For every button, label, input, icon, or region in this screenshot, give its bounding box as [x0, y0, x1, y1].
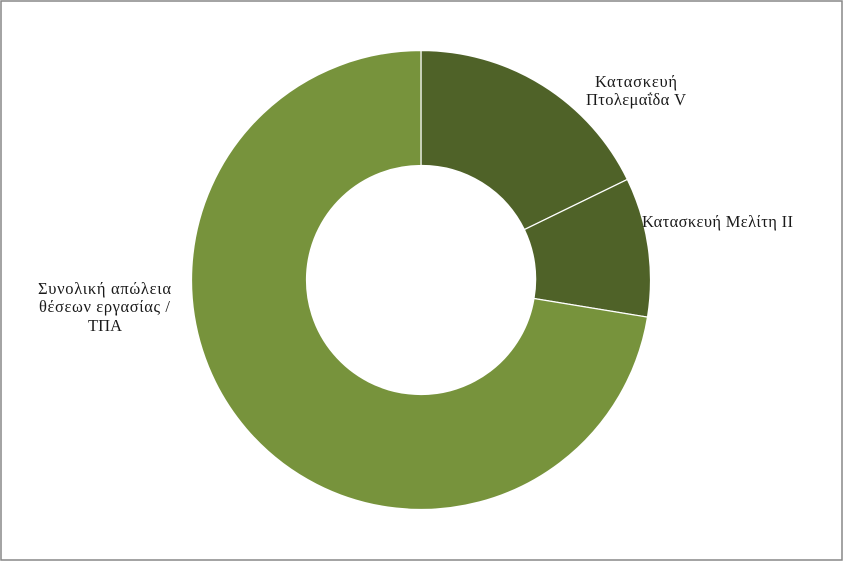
label: Κατασκευή Πτολεμαΐδα V: Κατασκευή	[595, 72, 677, 91]
label: Συνολική απώλεια θέσεων εργασίας / ΤΠΑ: ΤΠΑ	[88, 316, 122, 335]
label: Κατασκευή Πτολεμαΐδα V	[586, 72, 686, 109]
donut chart	[192, 50, 651, 510]
segment: Κατασκευή Πτολεμαΐδα V	[421, 50, 627, 230]
label: Συνολική απώλεια θέσεων εργασίας / ΤΠΑ: Συνολική απώλεια	[38, 279, 171, 298]
label: Κατασκευή Μελίτη ΙΙ: Κατασκευή Μελίτη ΙΙ	[642, 212, 793, 231]
segment: Κατασκευή Μελίτη ΙΙ	[524, 179, 651, 317]
label: Συνολική απώλεια θέσεων εργασίας / ΤΠΑ	[38, 279, 171, 335]
segment: Συνολική απώλεια θέσεων εργασίας / ΤΠΑ	[192, 50, 648, 510]
label: Κατασκευή Πτολεμαΐδα V: Πτολεμαΐδα V	[586, 90, 686, 109]
label: Συνολική απώλεια θέσεων εργασίας / ΤΠΑ: θέσεων εργασίας /	[39, 297, 170, 316]
